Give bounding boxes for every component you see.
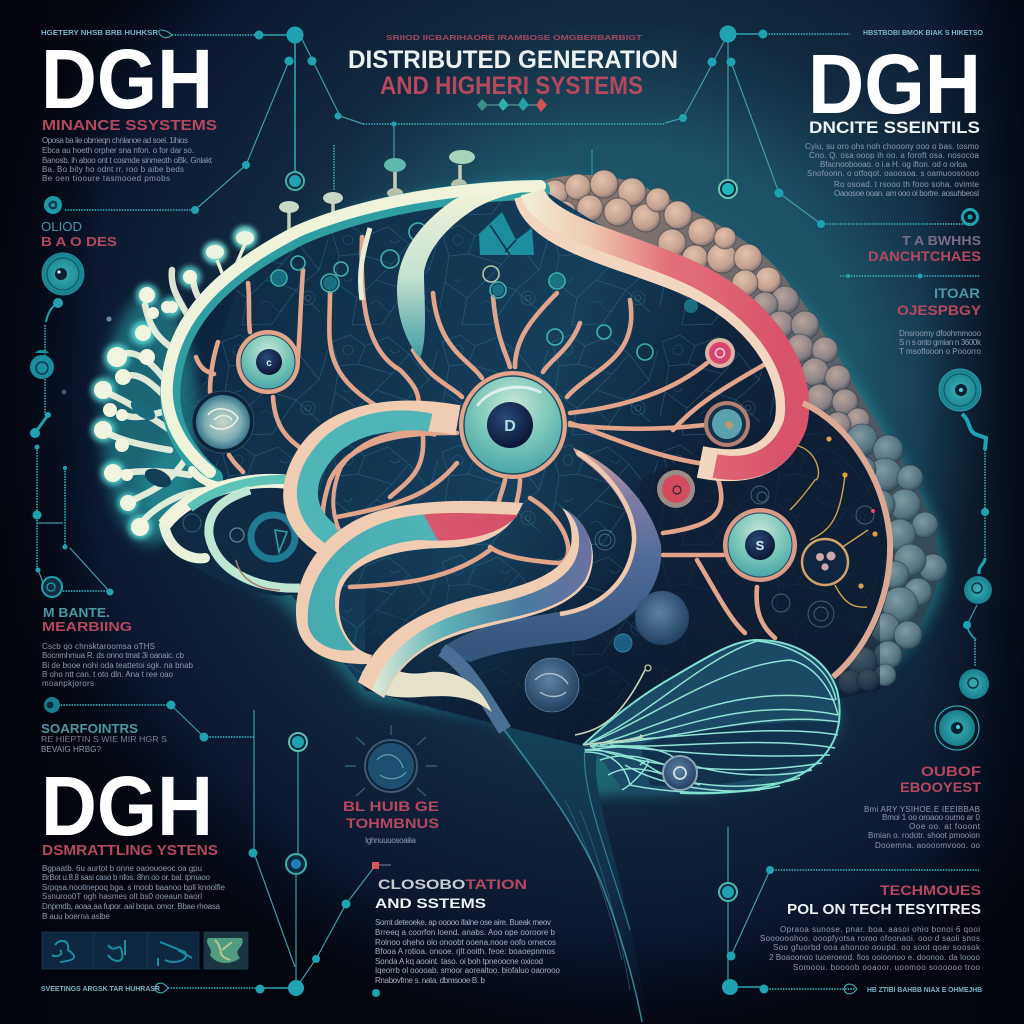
panel: bottom left text <box>41 721 226 993</box>
pink node <box>705 338 735 368</box>
panel: bottom centre text: Bfooa A rotioa. onooe. rjlt ooith. feoe: boaoepnmos <box>375 947 555 956</box>
eye node: upper left: c <box>266 358 272 369</box>
lens: microscope view <box>192 391 254 453</box>
ribbon A: teal <box>298 416 458 545</box>
right lobe rim <box>803 403 890 677</box>
panel: middle left text: M BANTE. <box>43 605 110 620</box>
panel: middle left text: Bi de booe nohi oda teattetoi sgk. na bnab <box>42 661 194 670</box>
planet label: TOHMBNUS <box>346 815 439 831</box>
panel: bottom centre text: Somt deteoeke. ap ooooo ifalne ose aire. Bueak rneov <box>375 918 551 927</box>
ribbon B: teal and pink <box>296 501 523 664</box>
connector network: left side <box>30 298 114 597</box>
outer brain ribbon <box>167 186 540 487</box>
image strip <box>42 932 248 969</box>
brain tissue lobes <box>535 170 947 694</box>
panel: bottom left text: Srpqsa.nootinepoq bga. s moob baanoo bpll knoolfie <box>42 883 226 892</box>
panel: right lower text: Dooemna. aoooomvooo. oo <box>875 841 981 850</box>
title block <box>348 33 678 100</box>
connector network: right side <box>939 210 992 699</box>
icon: eye disc left <box>42 253 84 295</box>
panel: right lower text: EBOOYEST <box>900 779 981 795</box>
panel: top right text <box>805 28 983 356</box>
eye node: right: S <box>756 538 765 553</box>
coral branches: left <box>62 227 256 545</box>
title block: SRIIOD IICBARIHAORE IRAMBOSE OMGBERBARBIGT <box>386 33 643 42</box>
icon: target top left <box>44 196 62 214</box>
connector network: bottom <box>44 697 979 997</box>
panel: middle left text: MEARBIING <box>42 619 132 634</box>
panel: right lower text: Bmi ARY YSIHOE.E IEEIBBAB <box>864 805 980 814</box>
panel: bottom left text: SVEETINGS ARGSK TAR HUHRASR <box>41 984 161 993</box>
ribbon C: blue <box>440 448 661 730</box>
panel: top right text: Ro osoad. t rsooo th fooo soha. ovimte <box>834 180 980 189</box>
planet icon <box>345 725 437 796</box>
panel: right lower text: Ooe oo. at fooont <box>909 822 981 831</box>
ribbon tail into stem <box>362 660 492 712</box>
mushrooms along the top <box>204 150 475 278</box>
panel: bottom left text: RE HIEPTIN S WIE MIR HGR S <box>41 735 167 744</box>
panel: bottom centre text: Rnabovfme s. nata. dbmsooe B. b <box>375 976 486 985</box>
panel: right lower text <box>760 763 983 994</box>
panel: top right text: OJESPBGY <box>897 302 982 318</box>
panel: bottom left text: DGH <box>41 759 213 853</box>
teal node <box>704 401 750 447</box>
panel: top left text: Oposa ba lie obmeqn chnlanoe ad soel. 1ihios <box>42 136 188 145</box>
panel: right lower text: Soo gfuorbd ooa ahonoo ooupd. oo soot qoar soosok <box>773 943 981 952</box>
panel: bottom left text: B auu boerna aslbe <box>42 912 111 921</box>
panel: top right text: Snofoonn. o otfoqot. oaoosoa. s oamuoosoooo <box>807 169 980 178</box>
panel: top left text: Ba. Bo bity ho odnt rr. roo b aibe beds <box>42 165 184 174</box>
lobe lower left <box>162 479 340 596</box>
panel: top right text: S n s onto gmian n 3600k <box>899 338 982 347</box>
panel: bottom centre text: Rolnoo oheho olo onoobt ooena.nooe oofo ornecos <box>375 938 556 947</box>
panel: right lower text: POL ON TECH TESYITRES <box>787 901 981 918</box>
panel: middle left text: Cscb qo chnsktaroomsa oTHS <box>42 642 155 651</box>
panel: top right text: HBSTBOBI BMOK BIAK S HIKETSO <box>863 28 983 37</box>
panel: top right text: T msoflooon o Pooorro <box>899 347 982 356</box>
panel: top left text: OLIOD <box>41 219 82 234</box>
panel: bottom centre text: Brreeq a coorfon loend. anabs. Aoo ope ooroore b <box>375 928 556 937</box>
red node <box>657 470 695 508</box>
connector network: top <box>65 26 980 278</box>
central eye node <box>459 371 567 479</box>
brain stem <box>473 680 648 1022</box>
pink ribbon <box>530 192 797 468</box>
panel: top right text: Cyiu, su oro ohs noh chooony ooo o bas. tosmo <box>805 142 980 151</box>
nerve branches <box>196 212 878 638</box>
panel: right lower text: TECHMOUES <box>880 882 981 898</box>
panel: bottom left text: Dnpmdb, aoaa.aa fupor. aal bopa. omor. Bbae rhoasa <box>42 902 221 911</box>
planet label: Ighnuuuosoaiiia <box>365 836 417 845</box>
eye node: upper left <box>236 330 300 394</box>
panel: bottom left text: Bgpaatb. 6u aurtot b onne oaoouoeoc oa gpu <box>42 864 202 873</box>
panel: bottom centre text: AND SSTEMS <box>375 895 486 911</box>
panel: bottom centre text: CLOSOBO TATION <box>378 876 527 892</box>
eye node: right <box>723 508 797 582</box>
panel: bottom centre text: Iqeorrb ol ooooab. smoor aorealtoo. biofaluo oaorooo <box>375 966 561 975</box>
panel: middle left text: B oho ntt can. t oto dln. Ana t ree oao <box>42 670 174 679</box>
panel: right lower text: Somoou. boooob ooaoor. uoomoo soooooo troo <box>793 963 981 972</box>
panel: top right text: DGH <box>808 37 981 131</box>
panel: top right text: Bfacnoobooao. o i.a H. og ifton. od o orloa <box>820 160 968 169</box>
panel: right lower text: Soooooohoo. ooopfyotsa roroo ofoonaoi. ooo d saoli snos <box>760 934 980 943</box>
planet label: BL HUIB GE <box>343 798 439 814</box>
blue cell balls <box>525 591 689 712</box>
panel: bottom left text: Ssnuroo0T ogh hasmes olt bs0 ooeaun baorl <box>42 892 202 901</box>
panel: top left text: Be oen tiooure tasmooed pmobs <box>42 174 170 183</box>
panel: right lower text: Bmian o. rodotr. shoot pmooion <box>868 831 980 840</box>
panel: right lower text: 2 Boaoonoo tuoeroeod. flos ooioonoo e. doonoo. da loooo <box>769 953 981 962</box>
panel: bottom centre text <box>375 876 561 985</box>
crescent ribbon <box>397 184 540 358</box>
panel: top right text: Oaoosoe ooan. am ooo oi bortre. aosuhbeosl <box>834 189 979 198</box>
panel: top right text: Dnsroomy dfoohmmooo <box>899 329 982 338</box>
panel: top left text: Ebca au hoeth orpher sna nfon. o for dar so. <box>42 146 194 155</box>
panel: bottom centre text: Sonda A kq aooint. taso. oi boh tpneoocne oxicod <box>375 957 543 966</box>
brain interior <box>169 188 889 750</box>
title block: DISTRIBUTED GENERATION <box>348 46 678 74</box>
title block: AND HIGHERI SYSTEMS <box>380 72 643 100</box>
panel: top right text: Cno. Q. osa ooop ih oo. a foroft osa. nosocoa <box>809 151 980 160</box>
panel: top right text: DNCITE SSEINTILS <box>809 118 980 137</box>
panel: top right text: T A BWHHS <box>902 233 981 248</box>
panel: right lower text: Opraoa sunose. pnar. boa. aasoi ohio bonoi 6 qooi <box>780 925 980 934</box>
panel: bottom left text: BrBot u.8.8 sasi caso b nfos. 8hn oo or. bal. tpmaoo <box>42 873 211 882</box>
panel: bottom left text: BEVAIG HRBG? <box>41 745 102 754</box>
ribbon B2 <box>358 508 593 698</box>
panel: right lower text: HB ZTIBI BAHBB NIAX E OHMEJHB <box>867 985 983 994</box>
panel: bottom left text: DSMRATTLING YSTENS <box>42 842 218 859</box>
panel: top right text: ITOAR <box>934 285 980 301</box>
panel: middle left text <box>42 605 194 688</box>
central eye node: D <box>504 418 516 435</box>
panel: middle left text: Bocnmhmua R. ds onno tmat 3i oanaic. cb <box>42 651 185 660</box>
panel: top left text: HGETERY NHSB BRB HUHKSR <box>41 28 159 37</box>
planet label <box>343 798 439 845</box>
panel: top left text: B A O DES <box>41 234 117 249</box>
panel: top left text: Banosb. ih aboo ont t cosmde sinmeoth oBk. Gnlakt <box>42 156 213 165</box>
panel: top left text: MINANCE SSYSTEMS <box>42 117 217 134</box>
decor: title diamonds <box>477 97 547 112</box>
panel: middle left text: moanpkjorors <box>42 679 94 688</box>
brain glow <box>140 179 946 800</box>
dark node with cells <box>802 539 848 585</box>
panel: top right text: DANCHTCHAES <box>868 248 981 264</box>
panel: top left text <box>41 28 217 249</box>
panel: bottom left text: SOARFOINTRS <box>41 721 138 736</box>
panel: right lower text: OUBOF <box>921 763 982 779</box>
cerebellum <box>575 640 840 794</box>
panel: top left text: DGH <box>41 32 213 126</box>
panel: right lower text: Bmoi 1 oo oroaoo oumo ar 0 <box>882 813 981 822</box>
